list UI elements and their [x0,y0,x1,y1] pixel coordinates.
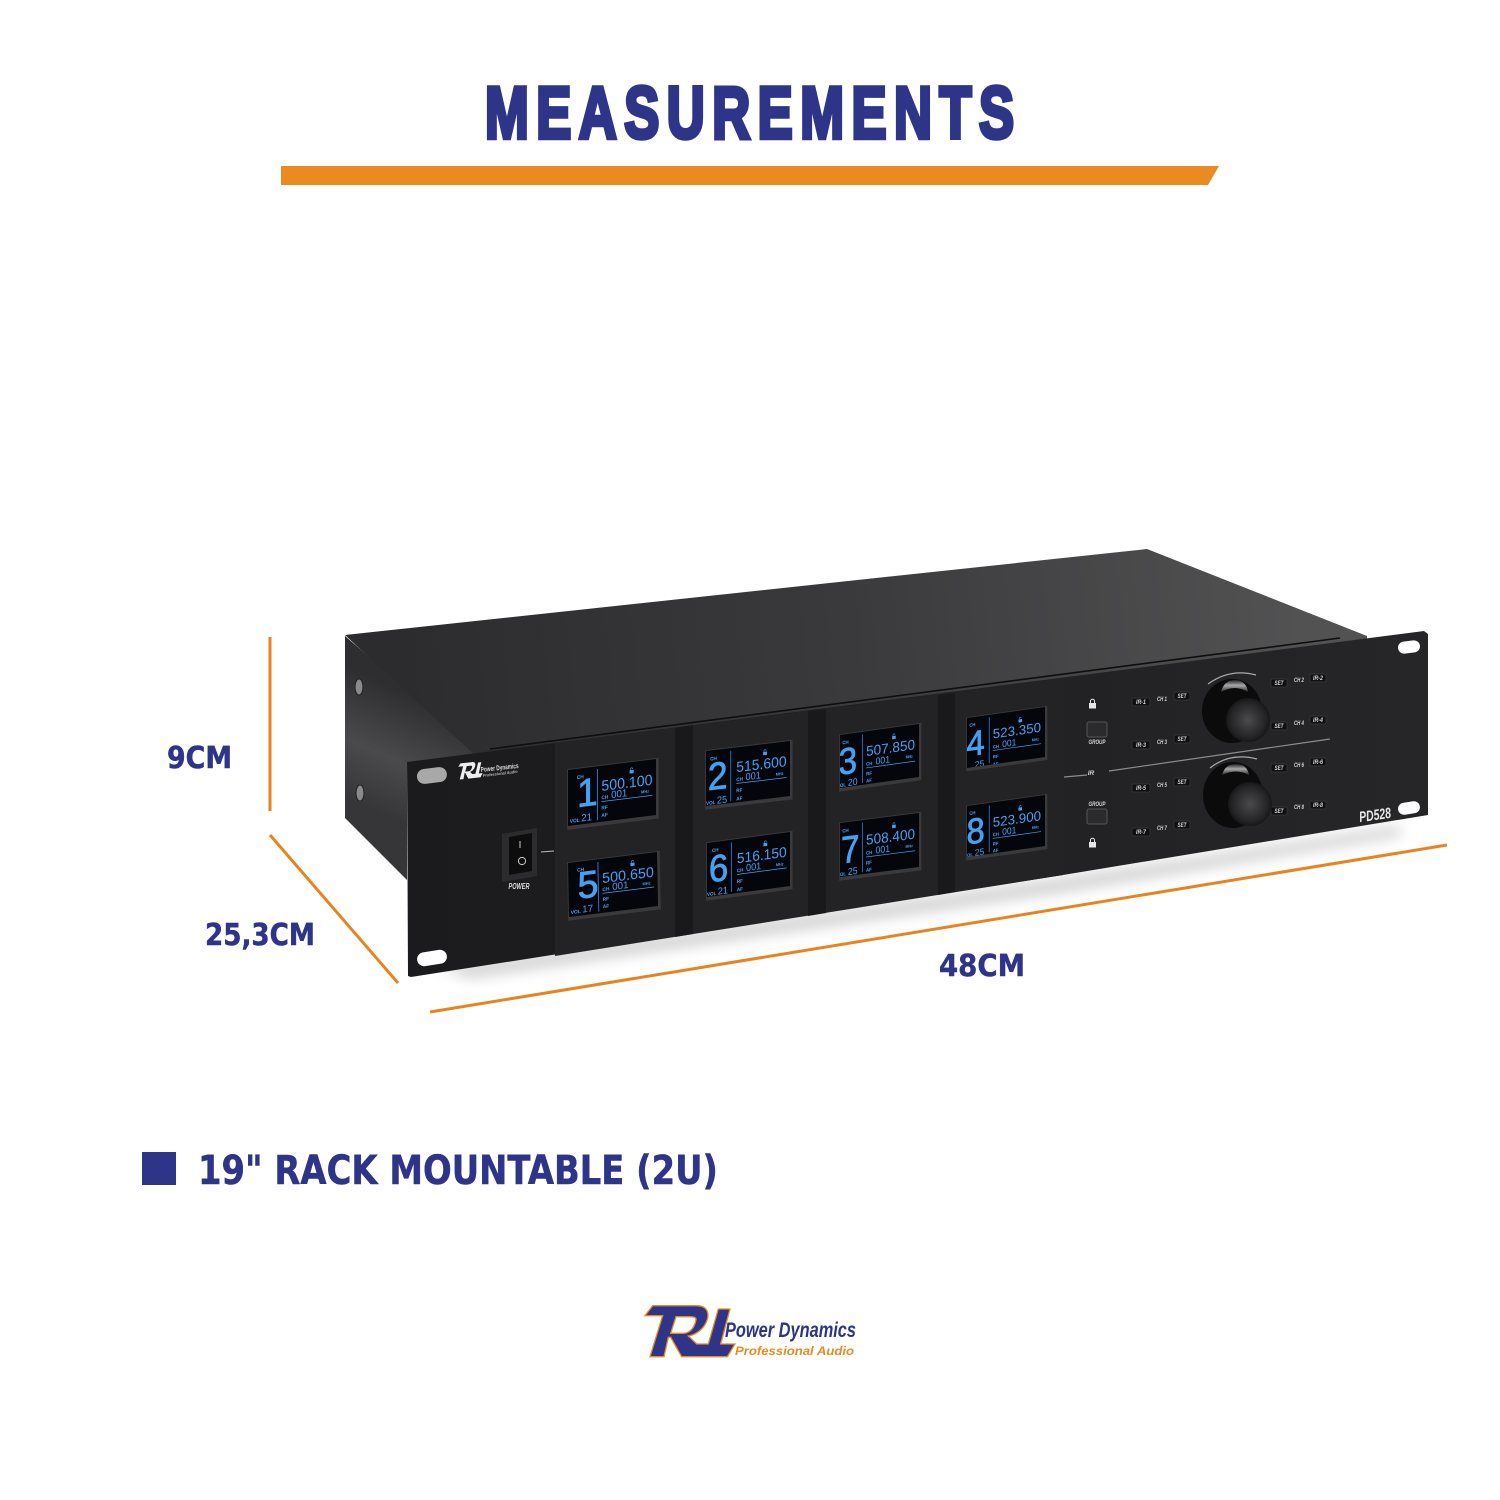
dimension line: depth [270,835,398,983]
display: channel 6: RF [737,878,743,885]
channel button labels: IR-5 [1136,785,1146,792]
display: channel 3: 507.850 [866,737,915,759]
left controls: lock and group buttons: IR [1088,770,1095,777]
display: channel 4: RF [993,754,999,760]
display: channel 1: AF [601,812,608,819]
display: channel 1: MHz [641,788,649,795]
display: channel 5: VOL [571,909,581,916]
channel button labels: CH 4 [1294,720,1304,727]
display: channel 3 [839,723,921,792]
channel button labels: SET [1178,736,1187,743]
display: channel 1: 500.100 [601,772,652,795]
display: channel 4: 25 [975,758,984,770]
title: MEASUREMENTS [485,73,1022,154]
channel button labels: SET [1178,693,1187,700]
title underline bar [281,166,1219,185]
logo wordmark: Power Dynamics [725,1319,856,1342]
display: channel 6: AF [737,886,743,893]
channel button labels: CH 5 [1157,782,1167,789]
knob: upper [1202,673,1270,743]
dimension line: height [268,637,272,811]
display: channel 5: AF [603,904,609,910]
display: channel 6: CH [712,847,719,854]
display: channel 6: 21 [718,885,728,898]
display: channel 2: VOL [706,800,716,807]
display: channel 3: CH [866,761,873,767]
channel button labels: IR-4 [1313,717,1323,724]
power switch [502,828,554,891]
display: channel 2: 515.600 [736,753,787,775]
brand logo [645,1306,856,1358]
display: channel 4 [966,706,1047,771]
channel button labels: IR-2 [1313,675,1323,682]
display: channel 8: 523.900 [993,808,1041,830]
display: channel 7: AF [866,867,872,873]
display: channel 5: RF [603,896,609,903]
display: channel 6: MHz [776,861,784,867]
display: channel 7: OL [840,871,846,877]
display: channel 4: 001 [1002,737,1016,749]
display: channel 8: OL [967,852,973,858]
product: rack receiver [345,549,1428,978]
control divider line [1064,739,1330,777]
small panel logo [458,761,519,780]
display: channel 5: 5 [577,862,599,907]
display: channel 5 [567,851,661,921]
bullet square [142,1152,176,1185]
channel button labels: CH 2 [1294,677,1304,684]
display: channel 7: CH [866,850,873,856]
channel button labels: IR-7 [1136,829,1146,836]
display: channel 5: CH [602,886,610,893]
channel button labels: IR-6 [1313,759,1323,766]
display: channel 1 [567,758,659,830]
display: channel 3: 3 [839,740,857,783]
model label: PD528 [1358,805,1393,826]
display: channel 8: RF [993,841,999,847]
display: channel 3: 001 [876,754,890,767]
width label: 48CM [939,949,1025,984]
display: channel 3: CH [842,739,849,745]
knob: lower [1203,757,1272,828]
channel button labels: SET [1178,779,1187,786]
display: channel 8: MHz [1032,825,1039,830]
display: channel 3: 20 [848,776,858,788]
rack mountable note: 19" RACK MOUNTABLE (2U) [198,1148,718,1194]
display: channel 2: RF [736,787,742,794]
height label: 9CM [167,741,232,776]
top panel [345,549,1367,758]
depth label: 25,3CM [205,918,315,953]
display: channel 2: 001 [745,770,761,783]
display: channel 2: 25 [717,794,727,807]
display: channel 7: RF [866,860,872,866]
display: channel 4: MHz [1032,737,1039,742]
small panel logo: Power Dynamics [480,763,519,774]
display: channel 2: CH [710,756,717,763]
display: channel 4: CH [993,744,999,750]
left controls: lock and group buttons [1087,699,1107,848]
logo mark [645,1306,735,1357]
display: channel 7: 001 [876,843,890,856]
display: channel 5: MHz [642,880,651,886]
display: channel 2: CH [736,776,743,783]
display: channel 8: 8 [966,811,985,853]
display: channel 1: RF [601,805,608,812]
display: channel 4: AF [993,761,999,767]
display: channel 1: 001 [611,788,628,801]
left controls: lock and group buttons: GROUP [1088,801,1106,808]
display: channel 1: 1 [577,770,598,816]
display: channel 2 [705,740,793,810]
display: channel 2: MHz [776,771,783,777]
top panel front lip [490,638,1340,749]
power switch: POWER [508,882,530,891]
display: channel 7: MHz [906,844,913,849]
channel button labels: SET [1274,765,1284,772]
display: channel 5: 500.650 [602,865,654,887]
channel button labels: IR-3 [1136,742,1146,749]
display: channel 3: OL [840,782,846,788]
channel button labels: SET [1274,723,1284,730]
channel button labels: CH 6 [1294,762,1304,769]
display: channel 5: 001 [612,880,629,893]
display: channel 4: CH [969,722,976,728]
dimension line: width [430,845,1447,1012]
channel button labels [1132,674,1326,836]
channel button labels: IR-8 [1313,802,1323,809]
display: channel 1: CH [601,794,609,801]
channel button labels: CH 3 [1157,739,1167,746]
display: channel 4: 523.350 [993,719,1041,742]
display: channel 8: 001 [1002,825,1016,837]
display: channel 6 [706,831,792,901]
display: channel 8 [966,794,1047,861]
small panel logo: Professional Audio [483,769,518,778]
display: channel 8: AF [993,848,999,854]
display: channel 8: 25 [975,846,984,858]
front faceplate [407,631,1428,977]
display: channel 6: CH [737,867,744,874]
display: channel 2: 2 [708,753,728,799]
channel button labels: SET [1274,808,1284,815]
display: channel 5: CH [577,867,585,874]
channel button labels: CH 1 [1157,696,1167,703]
display: channel 7: CH [842,827,849,834]
channel button labels: IR-1 [1136,699,1146,706]
side panel [345,636,480,880]
channel button labels: CH 8 [1294,804,1304,811]
display: channel 7: 508.400 [866,826,915,848]
mounting holes [416,640,1421,967]
display: channel 8: CH [969,810,976,816]
display: channel 6: 516.150 [737,843,787,866]
display: channel 4: 4 [966,723,985,765]
display: channel 3: AF [866,778,872,784]
display: channel 6: 6 [709,846,728,891]
display: channel 5: 17 [582,903,593,916]
display: channel 1: 21 [581,812,592,825]
channel button labels: SET [1274,680,1284,687]
display: channel 7: 25 [848,865,858,877]
display: channel 1: CH [577,774,584,781]
display: channel 7 [839,812,921,881]
logo tagline: Professional Audio [735,1344,854,1358]
display: channel 1: VOL [570,818,580,825]
display: channel 8: CH [993,831,999,837]
channel button labels: SET [1178,822,1187,829]
channel button labels: CH 7 [1157,825,1167,832]
display: channel 3: RF [866,770,872,777]
display: channel 6: 001 [746,861,761,874]
display: channel 7: 7 [841,827,859,872]
display: channel 3: MHz [906,754,913,760]
display: channel 2: AF [736,796,742,803]
display: channel 6: VOL [707,891,716,898]
left controls: lock and group buttons: GROUP [1088,739,1106,746]
cast shadow [440,826,1400,978]
